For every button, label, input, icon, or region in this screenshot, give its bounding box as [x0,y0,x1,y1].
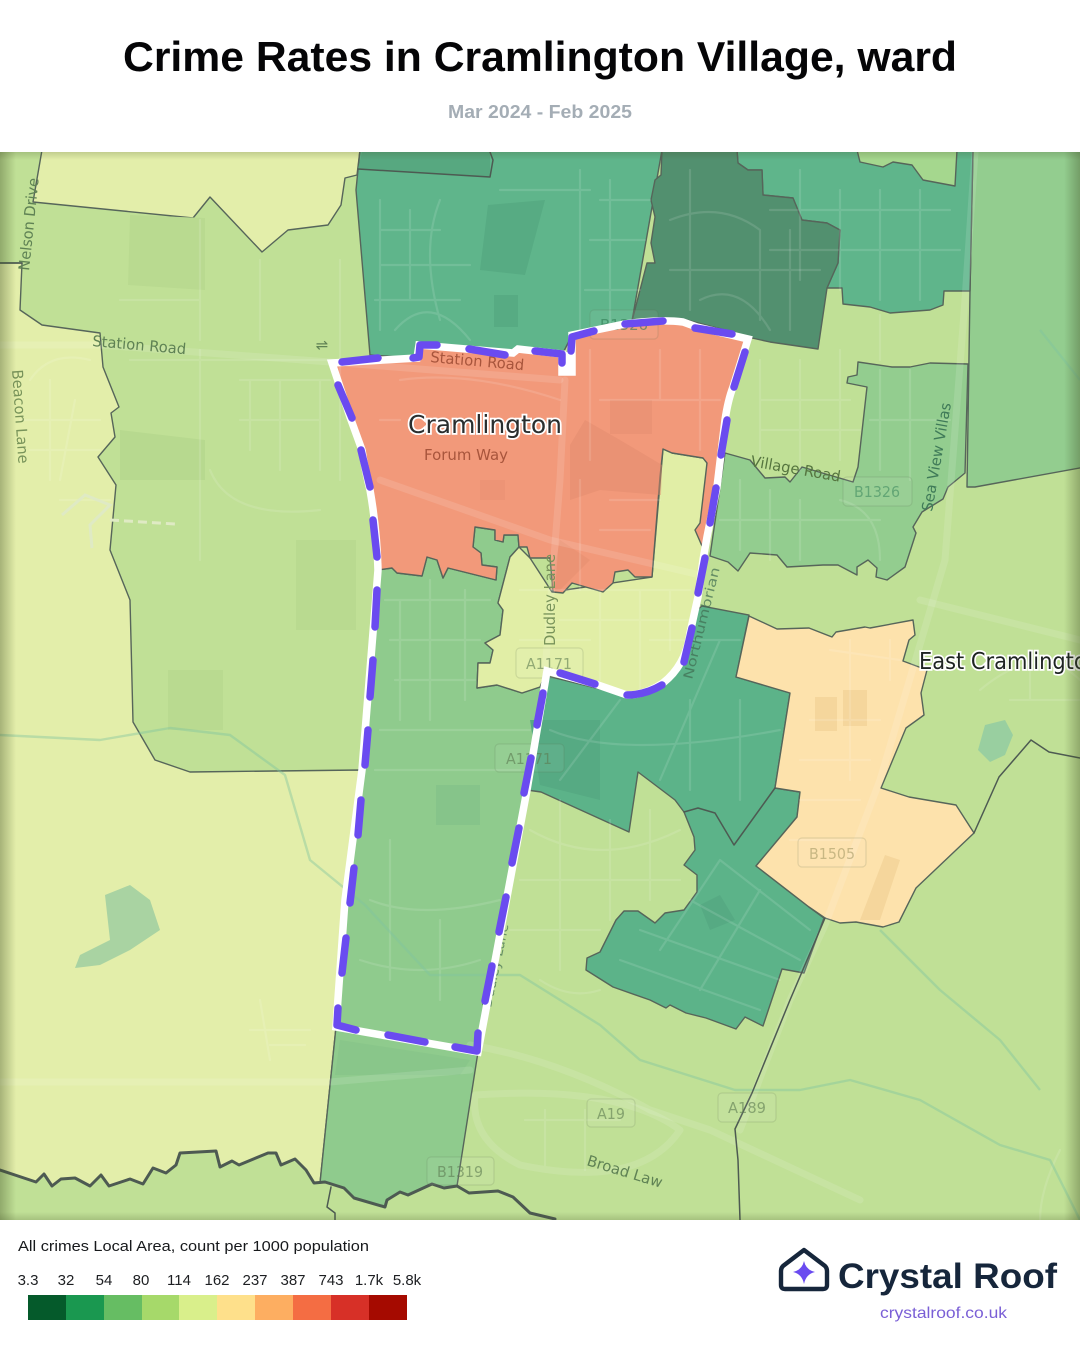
title: Crime Rates in Cramlington Village, ward [123,33,957,80]
road shield labels: B1326 [600,316,648,334]
street names: Broad Law [585,1152,665,1192]
road shield labels [437,316,900,1181]
legend tick labels: 54 [96,1272,112,1289]
subtitle: date range: Mar 2024 - Feb 2025 [448,102,632,122]
region: north teal area [356,150,662,358]
road shield labels: A1171 [506,750,552,768]
pond: west [75,885,160,968]
rail station symbol: ⇌ [316,336,329,354]
boundary lines [0,152,1080,1220]
legend tick labels: 114 [167,1272,191,1289]
brand logo [781,1250,1057,1322]
street names: Beacon Lane [8,369,33,464]
map labels [8,177,1080,1192]
legend tick labels: 1.7k [355,1272,384,1289]
legend title: All crimes Local Area, count per 1000 population [18,1238,369,1255]
legend tick labels: 387 [280,1272,306,1289]
street names: Village Road [749,452,842,486]
pond: east [978,720,1013,762]
street names: Station Road [92,332,187,358]
road shields [427,310,912,1185]
road shield labels: A1171 [526,655,572,673]
legend tick labels: 80 [133,1272,149,1289]
street names: Sea View Villas [918,401,955,513]
region: peach higher-crime area [736,616,974,927]
region: south-east teal area [527,606,824,1029]
road network [0,152,1080,1220]
legend tick labels: 743 [318,1272,344,1289]
website url: crystalroof.co.uk [880,1305,1008,1322]
legend tick labels: 3.3 [18,1272,38,1289]
street names: Nelson Drive [15,177,43,271]
region: north-east teal area [737,150,973,313]
legend tick labels [18,1272,422,1289]
street names: Dudley Lane [480,923,513,1009]
legend tick labels: 162 [204,1272,230,1289]
region: north-west yellow area [33,150,360,252]
ward purple dashes [337,321,745,1051]
region: top small light green area [857,150,957,186]
ward white outline [332,321,748,1052]
legend tick labels: 32 [58,1272,74,1289]
place name: Cramlington: Cramlington [408,410,562,439]
region: west yellow area [0,263,360,1186]
map regions: crime rate areas [0,150,1080,1207]
legend colour scale [28,1295,407,1320]
choropleth map [0,150,1080,1220]
river and ponds [0,330,1080,1220]
region: ward pale yellow area [477,449,710,695]
road shield labels: B1319 [437,1163,483,1181]
legend [18,1238,422,1320]
legend tick labels: 237 [242,1272,268,1289]
street names: Dudley Lane [541,554,559,646]
street names: Station Road [430,348,525,374]
street names [8,177,955,1192]
road shield labels: A189 [728,1099,766,1117]
footpath west [62,495,175,548]
region: dark green low-crime area [632,150,840,349]
road shield labels: B1505 [809,845,855,863]
icon: house with star [781,1250,827,1289]
wordmark: Crystal Roof [838,1257,1057,1296]
river boundary line [0,1151,555,1219]
legend tick labels: 5.8k [393,1272,422,1289]
street names: Forum Way [424,446,508,464]
land-use shading patches [120,152,900,930]
road shield labels: B1326 [854,483,900,501]
ward boundary [332,321,748,1052]
region: right-hand green area [967,150,1080,487]
region: ward southern green area [320,527,547,1207]
ward notch fill [566,352,568,368]
region: ward salmon high-crime area [332,322,748,593]
street names: Northumbrian [681,566,724,681]
map edge vignette [0,152,1080,1220]
road shield labels: A19 [597,1105,625,1123]
region: Village Road green area [710,362,968,580]
